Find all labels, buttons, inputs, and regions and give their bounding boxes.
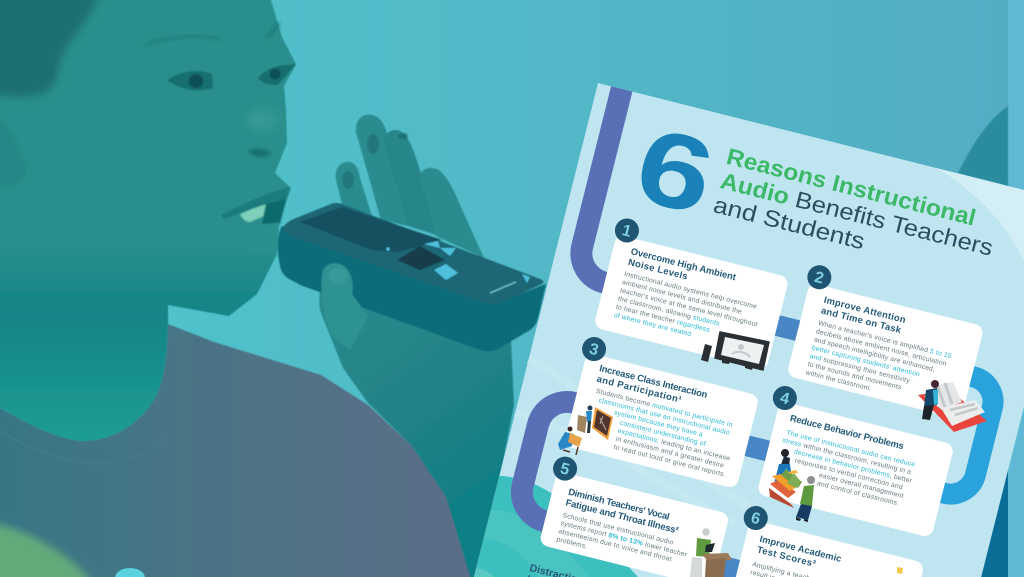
- upper lip: [221, 187, 290, 219]
- iris right: [270, 68, 280, 80]
- small blue led: [386, 247, 390, 251]
- photo: student speaking into microphone: [0, 0, 546, 577]
- card 1: to hear the teacher regardless: [615, 304, 711, 334]
- eye left: [167, 71, 213, 90]
- fingertip dirt: [398, 133, 408, 139]
- connector 3-4: [740, 434, 774, 462]
- card 4: stress within the classroom, resulting in a: [782, 437, 912, 476]
- card 1: [593, 234, 789, 371]
- circle 3: [580, 334, 609, 364]
- card 2: When a teacher's voice is amplified 5 to 15: [817, 320, 952, 360]
- card 1: Noise Levels: [627, 256, 689, 281]
- card 4: easier overall management: [818, 472, 904, 500]
- title: and Students: [711, 191, 868, 254]
- hand and arm: [319, 272, 514, 577]
- dark blue corner behind sheet: [975, 462, 1008, 577]
- card 1: ambient noise levels and distribute the: [621, 279, 743, 316]
- card 1: Overcome High Ambient: [630, 245, 737, 282]
- icon: teacher with open book: [918, 380, 987, 432]
- title: [711, 143, 1002, 285]
- microphone device: [278, 203, 546, 351]
- fingertip dirt: [342, 171, 354, 189]
- card 5: Diminish Teachers' Vocal: [567, 486, 671, 522]
- corner light arc: [936, 168, 1024, 260]
- circle 2: 2: [813, 269, 826, 288]
- card 5: [539, 471, 730, 577]
- thumb: [321, 263, 368, 350]
- card 4: The use of instructional audio can reduce: [786, 430, 916, 469]
- thumb nail: [328, 268, 348, 284]
- circle 2: [805, 263, 834, 292]
- title: Reasons Instructional: [724, 143, 979, 231]
- card 3: [564, 352, 760, 489]
- display: [397, 246, 445, 270]
- card 3: and Participation¹: [596, 373, 683, 405]
- nostril: [248, 149, 272, 157]
- green foreground blob: [0, 491, 125, 577]
- button square: [434, 264, 458, 280]
- card 3: expectations, leading to an increase: [617, 428, 731, 463]
- card 3: Increase Class Interaction: [598, 362, 709, 400]
- title: Benefits Teachers: [793, 186, 996, 261]
- card 1: the classroom, allowing students: [617, 295, 721, 328]
- button play: [424, 241, 440, 248]
- card 1: of where they are seated: [613, 312, 692, 338]
- connector 5-6: [710, 554, 744, 577]
- circle 1: [612, 216, 642, 245]
- card 2: better capturing students' attention: [811, 345, 921, 379]
- card 3: classrooms that use an instructional audio: [598, 397, 730, 437]
- right background strip: [1008, 0, 1024, 577]
- card 3: to read out loud or give oral reports.: [613, 444, 726, 479]
- card 5: Fatigue and Throat Illness²: [565, 496, 680, 535]
- icon: tablet and phone: [701, 332, 769, 370]
- card 1: Instructional audio systems help overcome: [623, 271, 758, 311]
- teeth: [240, 204, 268, 222]
- card 2: within the classroom.: [804, 369, 872, 393]
- card 4: Reduce Behavior Problems: [789, 412, 905, 451]
- iris left: [189, 74, 203, 88]
- card 5: Schools that use instructional audio: [562, 512, 674, 547]
- device top face: [284, 203, 544, 304]
- icon: classroom teacher and student: [558, 406, 613, 455]
- brow left: [145, 37, 220, 45]
- ear: [0, 105, 27, 190]
- nose highlight: [246, 108, 278, 132]
- subtle stripes: [484, 359, 1006, 577]
- infographic sheet: [447, 83, 1024, 577]
- card 3: Students become motivated to participate in: [595, 388, 733, 429]
- finger ring: [384, 130, 440, 236]
- speaker grille: [300, 207, 442, 252]
- card 1: teacher's voice at the same level throughout: [619, 287, 758, 329]
- card 6: [721, 519, 925, 577]
- circle 6: 6: [749, 510, 762, 528]
- card 5: problems.: [556, 536, 588, 551]
- circle 1: 1: [620, 222, 633, 241]
- circle 4: [770, 383, 799, 413]
- finger index: [336, 162, 372, 216]
- mouth interior: [262, 199, 286, 224]
- card 2: to the sounds and movements: [807, 361, 903, 392]
- title: Audio: [718, 167, 792, 210]
- background person hair: [958, 106, 1008, 186]
- card 6: Test Scores³: [756, 544, 817, 569]
- card 4: responses to verbal correction and: [794, 457, 903, 491]
- card 3: consistent understanding of: [619, 420, 707, 448]
- label: [490, 282, 516, 293]
- circle 5: 5: [558, 460, 571, 479]
- card 5: systems report 8% to 13% lower teacher: [560, 520, 688, 559]
- circle 6: [741, 503, 770, 533]
- card 4: [757, 401, 955, 538]
- cyan blob: [115, 568, 145, 577]
- big number 6: 6: [625, 105, 725, 238]
- card 2: and suppressing their sensitivity: [809, 353, 911, 385]
- card 4: decrease in behavior problems, better: [793, 449, 913, 485]
- card 2: decibels above ambient noise, articulation: [815, 328, 947, 368]
- neck and face: [0, 0, 296, 441]
- finger pinky: [420, 168, 484, 258]
- card 2: and speech intelligibility are enhanced,: [813, 336, 936, 374]
- card 2: Improve Attention: [823, 294, 907, 325]
- icon: teacher student books: [769, 449, 815, 522]
- card 3: in enthusiasm and a greater desire: [615, 436, 725, 470]
- purple line top-left: [575, 89, 666, 286]
- eye right: [258, 64, 296, 85]
- icon: partial trophy: [897, 567, 903, 574]
- button next: [440, 248, 456, 256]
- logo mark: [522, 274, 530, 283]
- icon: lecturer at podium: [690, 528, 732, 577]
- connector 1-2: [770, 314, 804, 342]
- purple line left: [516, 396, 589, 525]
- card 4: and control of classrooms.: [816, 480, 900, 508]
- device body front: [278, 226, 546, 351]
- brow right: [266, 23, 279, 38]
- card 2: and Time on Task: [820, 304, 903, 335]
- card 3: system because they have a: [613, 410, 704, 439]
- lower lip: [222, 222, 279, 254]
- fingertip dirt: [367, 134, 379, 154]
- sheet background: [447, 83, 1024, 577]
- card 5: absenteeism due to voice and throat: [558, 528, 672, 563]
- circle 5: [551, 454, 580, 483]
- circle 4: 4: [778, 390, 791, 408]
- collar shading: [0, 425, 165, 463]
- hair: [0, 0, 115, 97]
- bottom teal wave: [474, 476, 638, 577]
- circle 3: 3: [587, 341, 600, 359]
- card 6: Improve Academic: [759, 533, 843, 564]
- shirt: [0, 324, 474, 577]
- card 2: [786, 283, 984, 420]
- blue line right: [929, 373, 998, 499]
- finger middle: [356, 115, 408, 226]
